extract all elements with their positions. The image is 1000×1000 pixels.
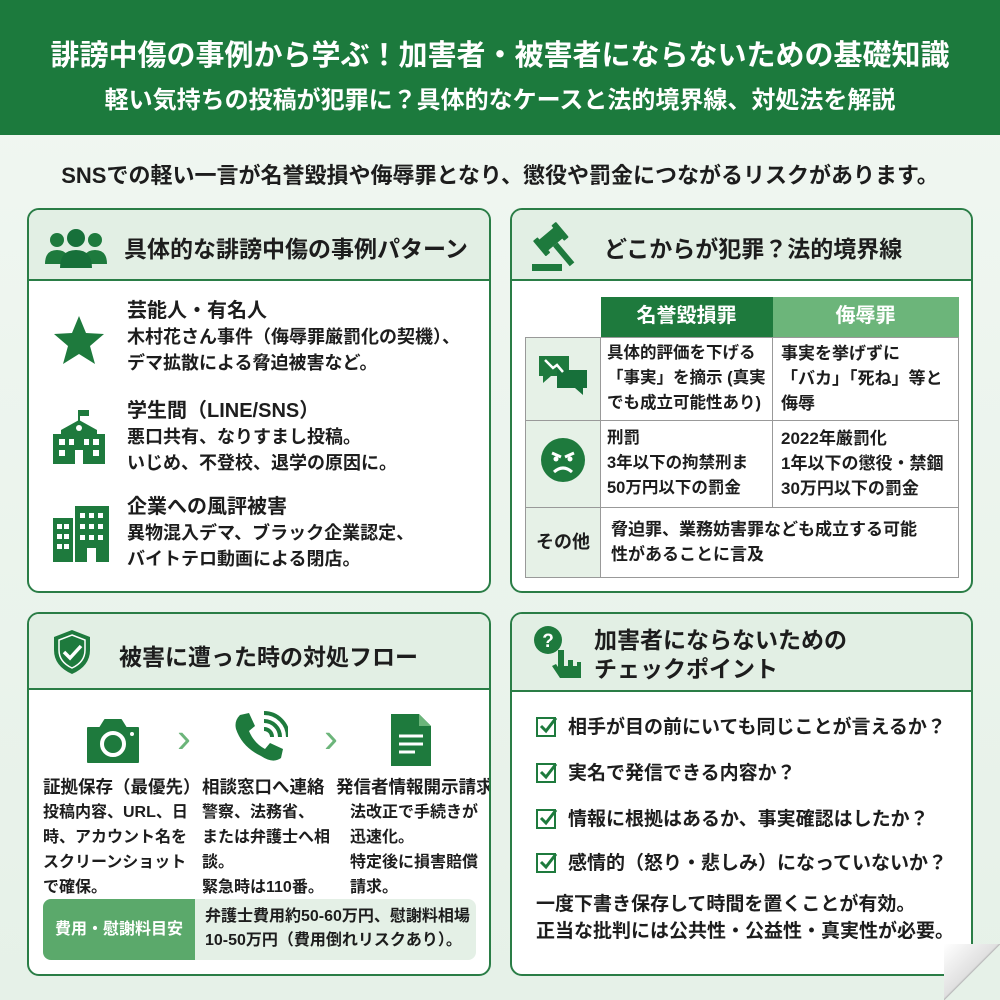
- item: celebrities: 木村花さん事件（侮辱罪厳罰化の契機）、: [127, 327, 460, 347]
- checklist: 感情的（怒り・悲しみ）になっていないか？: [568, 853, 947, 874]
- comparison table: 事実を挙げずに: [781, 344, 900, 363]
- comparison table: 3年以下の拘禁刑ま: [607, 454, 748, 472]
- comparison table: 刑罰: [607, 429, 640, 447]
- panel heading: 具体的な誹謗中傷の事例パターン: [124, 236, 468, 262]
- item: celebrities: [127, 300, 460, 373]
- item: students: [127, 400, 397, 473]
- icon: camera: [87, 719, 139, 763]
- icon: gavel: [532, 222, 574, 271]
- icon: shield: [54, 630, 90, 674]
- cost box: 10-50万円（費用倒れリスクあり）。: [205, 932, 462, 949]
- icon: star: [54, 316, 104, 364]
- comparison table: 侮辱: [781, 394, 815, 413]
- item: companies: 異物混入デマ、ブラック企業認定、: [127, 523, 414, 543]
- item: companies: 企業への風評被害: [127, 496, 287, 518]
- comparison table: でも成立可能性あり): [607, 394, 761, 412]
- panel: checkpoints: [510, 612, 973, 976]
- step 3: 法改正で手続きが: [350, 804, 478, 821]
- panel header: [512, 614, 971, 692]
- item: students: いじめ、不登校、退学の原因に。: [127, 453, 397, 473]
- comparison table: 2022年厳罰化: [781, 429, 887, 448]
- comparison table: 名誉毀損罪: [636, 305, 736, 327]
- cost box: 費用・慰謝料目安: [55, 921, 183, 938]
- icon: question hand: ?: [542, 631, 554, 652]
- panel heading: どこからが犯罪？法的境界線: [604, 236, 902, 262]
- step 1: 証拠保存（最優先）: [43, 777, 200, 797]
- comparison table: [525, 297, 959, 578]
- step 2: [202, 777, 330, 896]
- icon: school: [53, 410, 105, 464]
- panel header: [29, 614, 489, 690]
- panel heading: チェックポイント: [594, 656, 778, 682]
- item: students: 学生間（LINE/SNS）: [127, 400, 319, 422]
- panel heading: 加害者にならないための: [594, 627, 847, 653]
- icon: people: [45, 229, 107, 268]
- comparison table: 1年以下の懲役・禁錮: [781, 454, 943, 473]
- comparison table: 侮辱罪: [836, 305, 896, 327]
- icon: building: [53, 506, 109, 562]
- panel header: [512, 210, 971, 281]
- panel: legal boundary: [510, 208, 973, 593]
- arrow: ›: [177, 714, 191, 761]
- cost box: [43, 899, 476, 960]
- panel header: [29, 210, 489, 281]
- advice text: [536, 894, 954, 942]
- comparison table: 脅迫罪、業務妨害罪なども成立する可能: [611, 520, 917, 539]
- step 2: 緊急時は110番。: [202, 879, 324, 896]
- comparison table: 50万円以下の罰金: [607, 479, 741, 497]
- title: 誹謗中傷の事例から学ぶ！加害者・被害者にならないための基礎知識: [50, 40, 950, 72]
- header banner: [0, 0, 1000, 135]
- advice text: 一度下書き保存して時間を置くことが有効。: [536, 894, 915, 915]
- icon: angry face: [541, 438, 585, 482]
- panel heading: 被害に遭った時の対処フロー: [119, 644, 418, 670]
- item: students: 悪口共有、なりすまし投稿。: [127, 427, 361, 447]
- step 3: 請求。: [350, 879, 398, 896]
- step 2: 談。: [202, 854, 234, 871]
- comparison table: その他: [536, 532, 590, 552]
- step 1: [43, 777, 200, 896]
- arrow: ›: [324, 714, 338, 761]
- checklist: [536, 716, 947, 874]
- step 3: 迅速化。: [350, 829, 414, 846]
- icon: question hand: [534, 626, 581, 678]
- checklist: 情報に根拠はあるか、事実確認はしたか？: [568, 809, 929, 830]
- step 1: スクリーンショット: [43, 854, 186, 871]
- panel: case patterns: [27, 208, 491, 593]
- subtitle: 軽い気持ちの投稿が犯罪に？具体的なケースと法的境界線、対処法を解説: [105, 87, 895, 114]
- checklist: 相手が目の前にいても同じことが言えるか？: [568, 717, 946, 738]
- step 3: [336, 777, 491, 896]
- comparison table: 30万円以下の罰金: [781, 479, 919, 498]
- icon: phone: [236, 711, 288, 761]
- panel: response flow: [27, 612, 491, 976]
- comparison table: 具体的評価を下げる: [607, 344, 756, 362]
- comparison table: 「バカ」「死ね」等と: [781, 369, 942, 388]
- panel heading: [594, 627, 847, 682]
- item: celebrities: デマ拡散による脅迫被害など。: [127, 353, 378, 373]
- item: celebrities: 芸能人・有名人: [127, 300, 267, 322]
- step 1: 時、アカウント名を: [43, 829, 187, 846]
- step 1: で確保。: [43, 879, 107, 896]
- step 2: 相談窓口へ連絡: [202, 777, 324, 797]
- item: companies: [127, 496, 414, 569]
- icon: document: [391, 714, 431, 766]
- step 2: 警察、法務省、: [202, 804, 314, 821]
- advice text: 正当な批判には公共性・公益性・真実性が必要。: [536, 921, 954, 942]
- page curl: [944, 944, 1000, 1000]
- comparison table: 「事実」を摘示 (真実: [607, 369, 766, 387]
- checklist: 実名で発信できる内容か？: [568, 763, 796, 784]
- icon: speech bubbles: [539, 356, 587, 395]
- step 1: 投稿内容、URL、日: [43, 804, 188, 821]
- step 3: 発信者情報開示請求: [336, 777, 491, 797]
- step 3: 特定後に損害賠償: [350, 854, 478, 871]
- cost box: 弁護士費用約50-60万円、慰謝料相場: [205, 908, 470, 925]
- comparison table: 性があることに言及: [611, 545, 764, 564]
- step 2: または弁護士へ相: [202, 829, 330, 846]
- lead text: SNSでの軽い一言が名誉毀損や侮辱罪となり、懲役や罰金につながるリスクがあります。: [61, 163, 939, 188]
- item: companies: バイトテロ動画による閉店。: [127, 549, 360, 569]
